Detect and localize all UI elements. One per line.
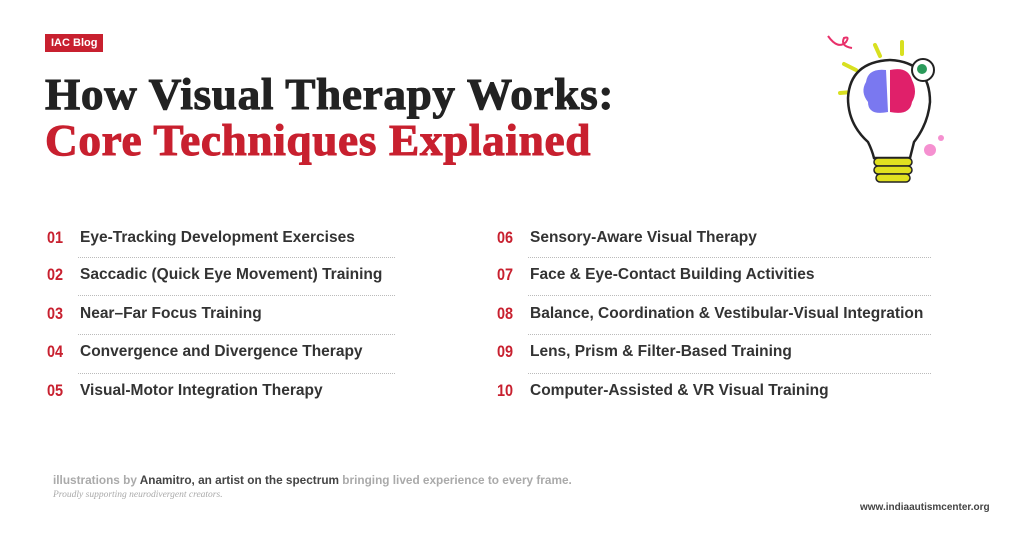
list: right column: 10 (497, 381, 513, 400)
list: left column: Convergence and Divergence Therapy (80, 343, 363, 360)
list: right column: Lens, Prism & Filter-Based Training (530, 343, 792, 360)
list: right column (497, 228, 931, 400)
list: right column: Computer-Assisted & VR Visual Training (530, 382, 829, 399)
credits text: illustrations by Anamitro, an artist on the spectrum bringing lived experience to every frame. (53, 473, 572, 487)
website url: www.indiaautismcenter.org (860, 502, 990, 513)
list: left column: 03 (47, 304, 63, 323)
list: left column (47, 228, 395, 400)
list: left column: 04 (47, 342, 63, 361)
list: left column: Visual-Motor Integration Therapy (80, 382, 323, 399)
subnote: Proudly supporting neurodivergent creators. (53, 490, 223, 500)
list: right column: Face & Eye-Contact Building Activities (530, 266, 815, 283)
list: right column: 07 (497, 265, 513, 284)
title line 2: Core Techniques Explained (45, 116, 591, 165)
title line 1: How Visual Therapy Works: (45, 70, 614, 119)
list: left column: Near–Far Focus Training (80, 305, 262, 322)
list: left column: 05 (47, 381, 63, 400)
list: right column: Balance, Coordination & Vestibular-Visual Integration (530, 305, 923, 322)
list: left column: Eye-Tracking Development Exercises (80, 229, 355, 246)
icon: lightbulb with brain (827, 35, 944, 183)
list: right column: 06 (497, 228, 513, 247)
list: right column: 08 (497, 304, 513, 323)
list: right column: 09 (497, 342, 513, 361)
list: right column: Sensory-Aware Visual Therapy (530, 229, 757, 246)
list: left column: Saccadic (Quick Eye Movement) Training (80, 266, 382, 283)
list: left column: 02 (47, 265, 63, 284)
tag: IAC Blog: IAC Blog (51, 37, 97, 49)
list: left column: 01 (47, 228, 63, 247)
tag: IAC Blog (45, 34, 103, 52)
